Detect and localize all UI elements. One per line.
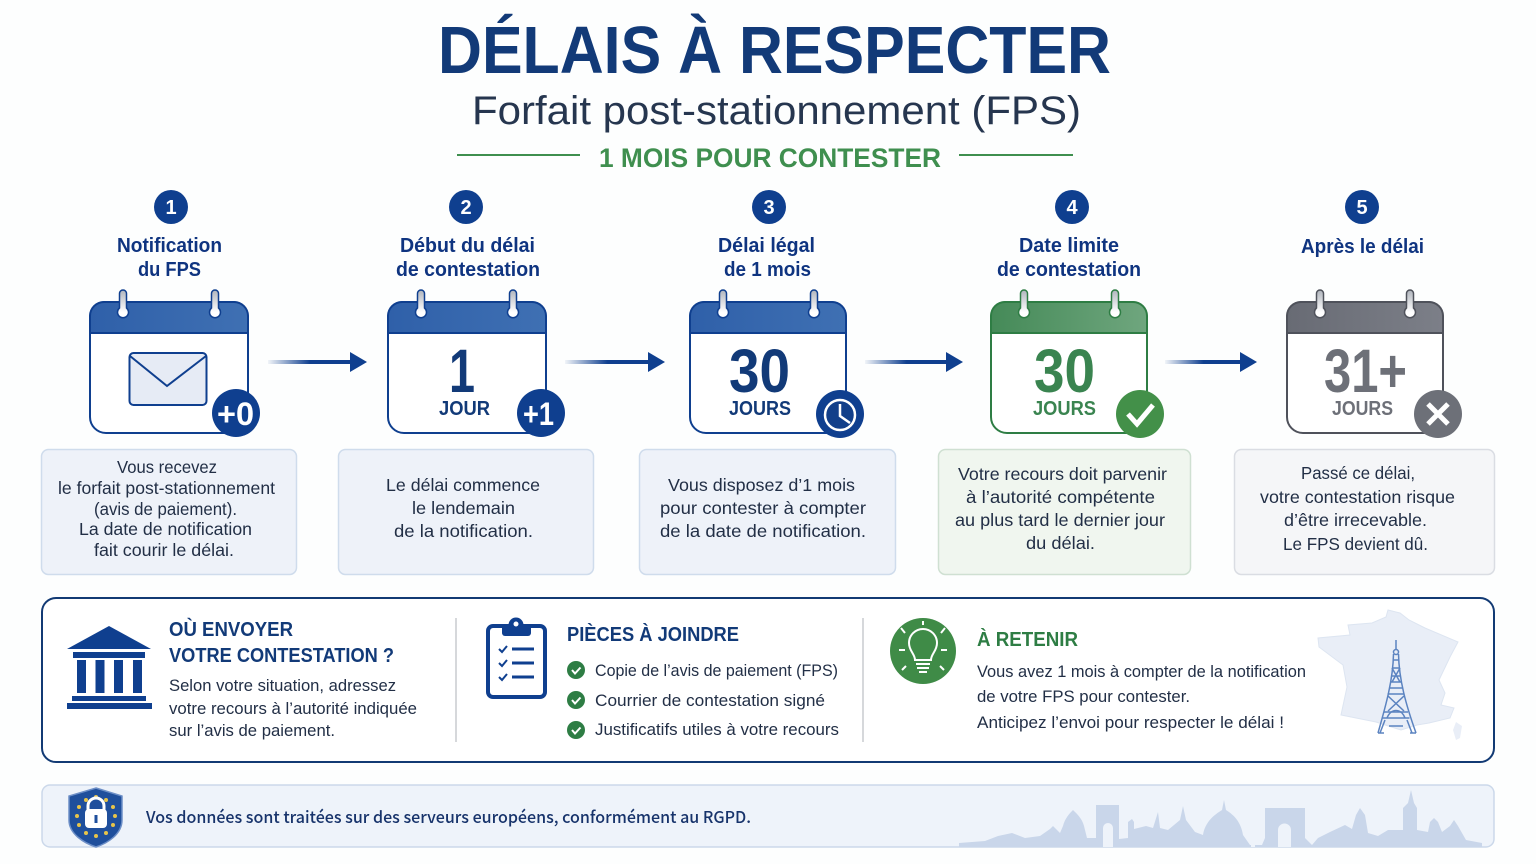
title: DÉLAIS À RESPECTER: [438, 13, 1111, 88]
calendar 31+ jours cross: 31+: [1324, 337, 1407, 405]
step number 3: [752, 190, 786, 224]
step number 2: [449, 190, 483, 224]
step number 3: 3: [763, 197, 775, 219]
step 4 description: [938, 450, 1190, 574]
calendar 30 jours check: JOURS: [1033, 398, 1096, 420]
calendar 30 jours clock: [690, 290, 864, 438]
calendar 30 jours clock: 30: [729, 337, 790, 405]
where to send: Selon votre situation, adressez: [169, 676, 396, 695]
tagline with side rules: 1 MOIS POUR CONTESTER: [599, 143, 941, 173]
step 1 description: Vous recevez: [117, 457, 217, 477]
icon: government building: [67, 626, 152, 709]
step 2 description: de la notification.: [394, 521, 533, 541]
step 2 heading: [396, 235, 540, 281]
map of France with Eiffel tower: [1318, 610, 1462, 740]
calendar with envelope: [90, 290, 260, 437]
key takeaway: [977, 628, 1306, 732]
step 5 description: Passé ce délai,: [1301, 463, 1415, 483]
key takeaway: de votre FPS pour contester.: [977, 687, 1190, 706]
key takeaway: Anticipez l’envoi pour respecter le délai !: [977, 713, 1284, 732]
step number 1: 1: [165, 197, 177, 219]
privacy statement: Vos données sont traitées sur des serveurs européens, conformément au RGPD.: [145, 804, 751, 828]
where to send: sur l’avis de paiement.: [169, 721, 335, 740]
step 3 heading: [718, 235, 815, 281]
step 4 heading: [997, 235, 1141, 281]
calendar 30 jours check: 30: [1034, 337, 1095, 405]
documents list: PIÈCES À JOINDRE: [567, 623, 739, 646]
panel: practical information: [42, 598, 1494, 762]
step 1 heading: [117, 235, 222, 281]
step 1: notification: [42, 190, 296, 574]
step number 4: 4: [1066, 197, 1078, 219]
step 5 description: Le FPS devient dû.: [1283, 534, 1428, 554]
calendar 31+ jours cross: [1287, 290, 1462, 438]
step 5: after the deadline: [1234, 190, 1494, 574]
icon: clipboard checklist: [488, 618, 545, 697]
step 4 description: au plus tard le dernier jour: [955, 510, 1165, 530]
step 3 description: de la date de notification.: [660, 521, 866, 541]
step number 4: [1055, 190, 1089, 224]
calendar with envelope: +0: [217, 396, 254, 432]
calendar 30 jours check: [991, 290, 1164, 438]
step 3 description: [640, 450, 896, 574]
step 5 heading: Après le délai: [1301, 236, 1424, 258]
step 1 heading: du FPS: [138, 259, 201, 281]
step 1 description: [42, 450, 296, 574]
step number 2: 2: [460, 197, 472, 219]
step 2 heading: de contestation: [396, 259, 540, 281]
panel: data protection strip: [42, 785, 1494, 847]
icon: light bulb: [890, 618, 956, 684]
key takeaway: À RETENIR: [977, 628, 1079, 651]
step 1 heading: Notification: [117, 235, 222, 257]
icon: EU shield with padlock: [69, 788, 122, 847]
calendar 31+ jours cross: JOURS: [1332, 398, 1393, 420]
step 3 heading: Délai légal: [718, 235, 815, 257]
item 1: Copie de l’avis de paiement (FPS): [595, 661, 838, 680]
arrow 1 to 2: [268, 352, 367, 372]
step 1 description: (avis de paiement).: [94, 499, 237, 519]
calendar 1 jour: 1: [449, 337, 475, 405]
where to send: VOTRE CONTESTATION ?: [169, 645, 394, 667]
calendar 30 jours clock: JOURS: [729, 398, 791, 420]
step 2: start of period: [338, 190, 594, 574]
step 2 description: [338, 450, 594, 574]
step number 5: 5: [1356, 197, 1368, 219]
step 4 heading: de contestation: [997, 259, 1141, 281]
step 3 heading: de 1 mois: [724, 259, 811, 281]
where to send: OÙ ENVOYER: [169, 617, 294, 641]
step 4 description: à l’autorité compétente: [966, 487, 1155, 507]
calendar 1 jour: [388, 290, 565, 437]
arrow 4 to 5: [1165, 352, 1257, 372]
key takeaway: Vous avez 1 mois à compter de la notification: [977, 662, 1306, 681]
step 2 description: Le délai commence: [386, 475, 540, 495]
step 4: deadline: [938, 190, 1190, 574]
step number 5: [1345, 190, 1379, 224]
step 3: legal period: [640, 190, 896, 574]
documents list: [567, 623, 839, 739]
calendar 1 jour: +1: [523, 396, 554, 432]
step 5 description: votre contestation risque: [1260, 487, 1455, 507]
arrow 3 to 4: [865, 352, 963, 372]
where to send: [169, 617, 417, 740]
arrow 2 to 3: [565, 352, 665, 372]
Eiffel tower: [1378, 640, 1416, 733]
skyline: [959, 790, 1482, 847]
step 5 description: d’être irrecevable.: [1284, 510, 1427, 530]
step 1 description: La date de notification: [79, 519, 252, 539]
where to send: votre recours à l’autorité indiquée: [169, 699, 417, 718]
subtitle: Forfait post-stationnement (FPS): [472, 89, 1081, 133]
step 1 description: fait courir le délai.: [94, 540, 234, 560]
item 2: Courrier de contestation signé: [595, 691, 825, 710]
step 2 description: le lendemain: [412, 498, 515, 518]
step 1 description: le forfait post-stationnement: [58, 478, 275, 498]
step 3 description: Vous disposez d’1 mois: [668, 475, 855, 495]
step 4 description: du délai.: [1026, 533, 1095, 553]
step number 1: [154, 190, 188, 224]
header: [438, 13, 1111, 173]
step 4 heading: Date limite: [1019, 235, 1119, 257]
step 3 description: pour contester à compter: [660, 498, 866, 518]
step 2 heading: Début du délai: [400, 235, 535, 257]
step 5 description: [1234, 450, 1494, 574]
item 3: Justificatifs utiles à votre recours: [595, 720, 839, 739]
step 4 description: Votre recours doit parvenir: [958, 464, 1167, 484]
calendar 1 jour: JOUR: [439, 398, 491, 420]
